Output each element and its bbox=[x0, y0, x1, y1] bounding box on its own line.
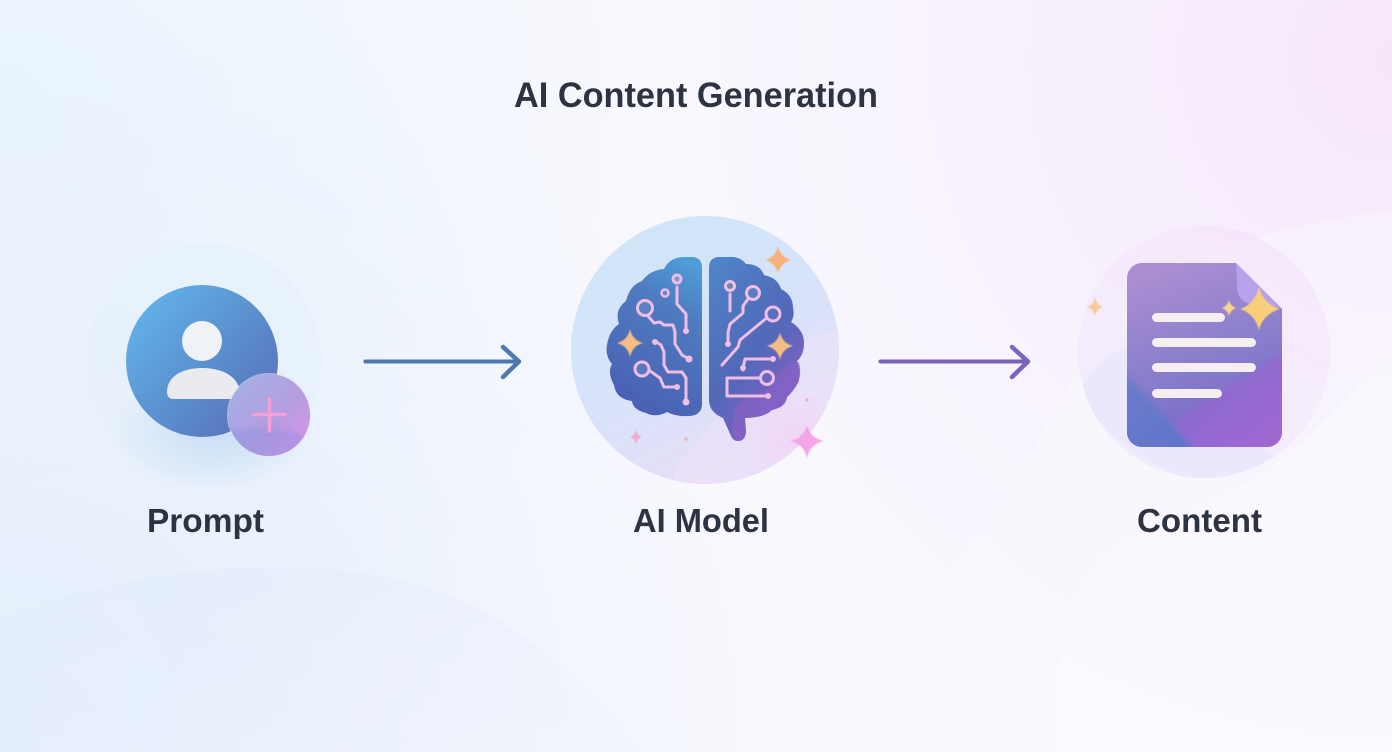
label: AI model: AI Model bbox=[633, 502, 769, 539]
halo circle bbox=[571, 216, 839, 484]
panel: AI model icon bbox=[571, 216, 860, 490]
label: prompt: Prompt bbox=[147, 502, 264, 539]
halo circle bbox=[1078, 226, 1330, 478]
page fold bbox=[1236, 263, 1280, 308]
plus badge bbox=[226, 373, 312, 460]
sparkles bbox=[1087, 287, 1280, 330]
user shoulders bbox=[167, 368, 240, 399]
arrow: model to content bbox=[880, 347, 1028, 377]
brain right hemisphere bbox=[709, 257, 804, 441]
panel: content icon bbox=[1078, 226, 1330, 484]
panel: prompt icon bbox=[126, 285, 311, 479]
document bbox=[1127, 263, 1282, 447]
sparkles bbox=[617, 246, 824, 458]
circuits right bbox=[722, 282, 780, 398]
plus sign bbox=[254, 399, 285, 431]
halo circle bbox=[86, 243, 322, 479]
title: AI Content Generation bbox=[514, 76, 878, 115]
brain left hemisphere bbox=[607, 257, 702, 416]
circuits left bbox=[635, 275, 691, 404]
user disc bbox=[126, 285, 278, 437]
user head bbox=[182, 321, 222, 361]
label: content: Content bbox=[1137, 502, 1262, 539]
arrow: prompt to model bbox=[366, 347, 519, 377]
text lines bbox=[1152, 313, 1256, 398]
